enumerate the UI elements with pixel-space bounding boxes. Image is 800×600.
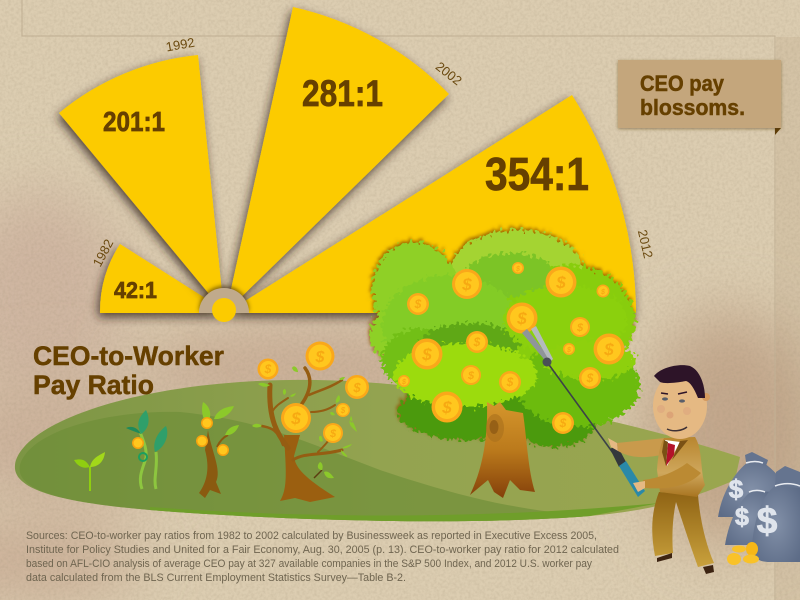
- text block: sources: based on AFL-CIO analysis of average CEO pay at 327 available companies in the S&P 500 Index, and 2012 U.S. worker pay: [26, 558, 592, 570]
- wedge: 1992: [59, 55, 224, 312]
- text block: sources: Sources: CEO-to-worker pay ratios from 1982 to 2002 calculated by Businessweek as reported in Executive Excess 2005,: [26, 530, 597, 542]
- icon: medium tree with coins: $: [264, 362, 272, 376]
- hub: [199, 288, 249, 322]
- icon: money bags: [718, 452, 800, 565]
- hill: [15, 380, 740, 521]
- value: 281:1: 281:1: [302, 73, 383, 114]
- figure: businessman: [608, 365, 714, 574]
- arm: lower: [643, 463, 701, 488]
- wedge: 2012: [226, 95, 636, 313]
- shoes: [657, 553, 714, 574]
- icon: medium tree with coins: $: [290, 409, 301, 428]
- coins: $: [586, 371, 594, 385]
- gold coins: [727, 542, 759, 565]
- coins: $: [576, 322, 584, 334]
- icon: medium tree with coins: $: [329, 428, 337, 440]
- coins: $: [555, 273, 566, 292]
- shirt and tie: [665, 440, 680, 466]
- tree trunk: [470, 402, 535, 498]
- wedge: 2002: [226, 7, 449, 312]
- icon: sprout with coin: [126, 410, 167, 489]
- icon: medium tree with coins: $: [315, 349, 326, 366]
- coins: $: [473, 335, 481, 349]
- label: CEO pay blossoms: [618, 60, 781, 135]
- heading: CEO-to-Worker Pay Ratio: Pay Ratio: [33, 370, 154, 400]
- coins: $: [506, 375, 514, 389]
- coins: $: [516, 309, 527, 328]
- hair: [654, 365, 705, 398]
- icon: medium tree with coins: $: [352, 380, 361, 395]
- text block: sources: [26, 530, 619, 584]
- coins: $: [515, 266, 520, 273]
- label: CEO pay blossoms: blossoms.: [640, 95, 745, 120]
- coins: [398, 262, 624, 434]
- head: [653, 373, 707, 439]
- coins: $: [559, 416, 567, 430]
- text block: sources: Institute for Policy Studies and United for a Fair Economy, Aug. 30, 2005 (p. 13). CEO-to-worker pay ratio for 2012 calculated: [26, 544, 619, 556]
- fan chart: [59, 7, 656, 322]
- tree canopy: [370, 230, 640, 447]
- coins: $: [603, 340, 614, 359]
- heading: CEO-to-Worker Pay Ratio: [33, 341, 224, 400]
- heading: CEO-to-Worker Pay Ratio: CEO-to-Worker: [33, 341, 224, 371]
- icon: money tree: [370, 230, 640, 498]
- coins: $: [467, 370, 475, 382]
- wedge: 1982: [100, 244, 224, 313]
- face: [657, 392, 691, 431]
- bag: middle: $: [735, 503, 749, 531]
- coins: $: [600, 289, 605, 296]
- year: 2002: 2002: [433, 59, 465, 88]
- value: 201:1: 201:1: [103, 106, 165, 137]
- icon: medium tree with coins: [252, 342, 369, 502]
- jacket: [657, 437, 705, 497]
- icon: pruning shears: [522, 326, 645, 497]
- year: 2012: 2012: [635, 228, 656, 260]
- bag: back: $: [729, 474, 744, 504]
- coins: $: [461, 275, 472, 294]
- icon: seedling: [74, 452, 105, 491]
- coins: $: [401, 379, 406, 386]
- year: 1992: 1992: [165, 35, 196, 54]
- bag: front: $: [757, 500, 778, 541]
- icon: medium tree with coins: $: [340, 406, 346, 415]
- text block: sources: data calculated from the BLS Current Employment Statistics Survey—Table B-2.: [26, 572, 406, 584]
- label: CEO pay blossoms: CEO pay: [640, 71, 725, 96]
- value: 354:1: 354:1: [485, 148, 589, 200]
- year: 1982: 1982: [90, 237, 116, 269]
- arm: upper: [617, 438, 665, 457]
- coins: $: [566, 347, 571, 354]
- value: 42:1: 42:1: [114, 277, 157, 303]
- icon: small tree with coins: [196, 402, 239, 498]
- legs: [652, 492, 714, 567]
- coins: $: [441, 398, 452, 417]
- coins: $: [414, 297, 422, 311]
- coins: $: [421, 345, 432, 364]
